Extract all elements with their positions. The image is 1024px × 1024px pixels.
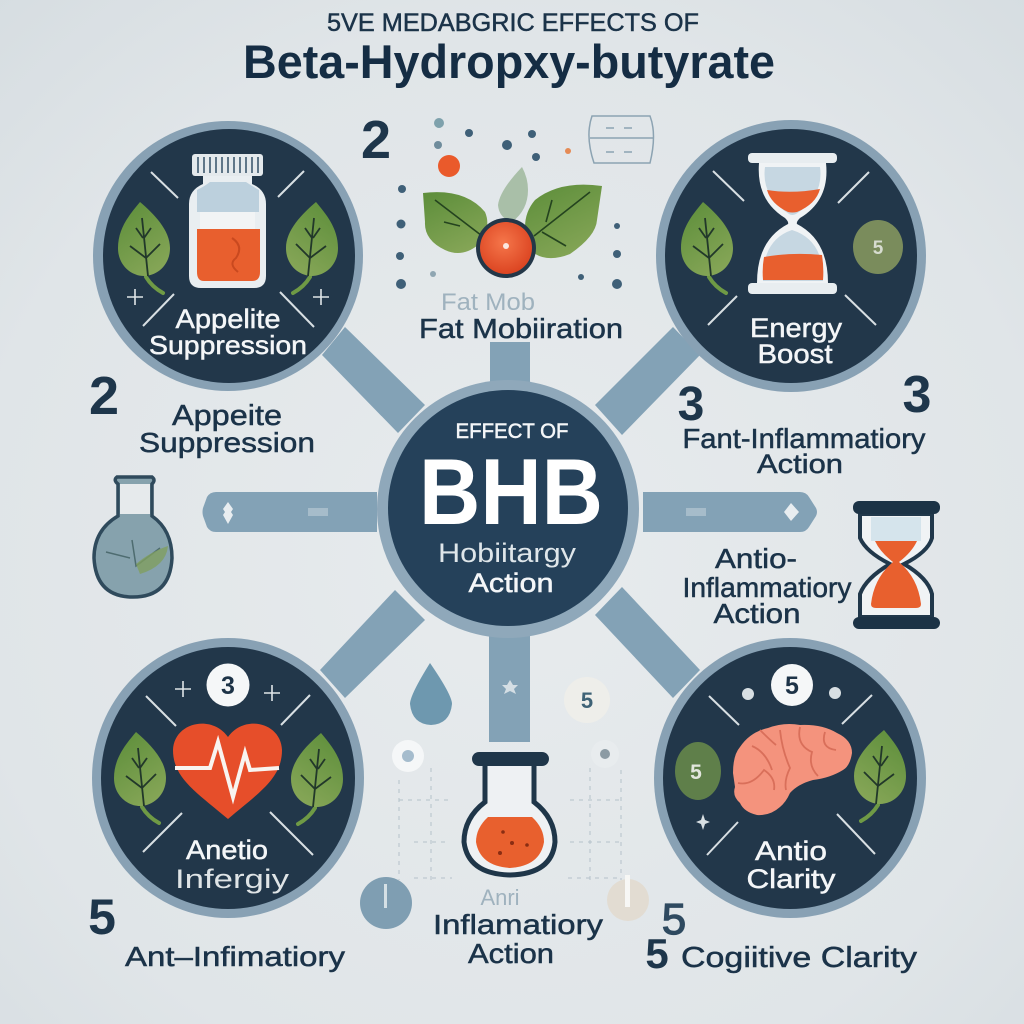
panel: energy boost — [656, 120, 926, 392]
icon: small badge 5: 5 — [581, 688, 593, 713]
label: anti-inflammatory top right: Fant-Inflammatiory — [682, 423, 926, 454]
label: Antio — [755, 836, 827, 866]
panel: anti-inflammatory heart — [92, 638, 364, 918]
label: anti-inflammatory top right — [682, 423, 926, 479]
label: inflammatory action: Inflamatiory — [433, 909, 603, 940]
panel: center BHB: BHB — [419, 439, 603, 544]
icon: sparkles — [127, 289, 329, 305]
label: cognitive clarity: Cogiitive Clarity — [681, 942, 918, 974]
label: anti-inflammatory top right: Action — [757, 449, 843, 479]
panel: center BHB — [377, 380, 639, 638]
label — [175, 835, 290, 894]
fat mobilization icon group — [396, 116, 654, 316]
label: anti-inflammatory right: Action — [714, 598, 800, 629]
label: inflammatory action — [433, 909, 603, 969]
icon: center leaves — [423, 167, 602, 278]
number 2 top: 2 — [361, 110, 391, 170]
label — [746, 836, 836, 894]
label: Clarity — [746, 864, 836, 894]
fat mobilization icon group: Fat Mob — [441, 289, 535, 316]
icon: badge 5 green — [675, 742, 721, 800]
label: anti-inflammatory right — [682, 543, 852, 629]
icon: brain — [733, 724, 852, 815]
icon: flask center — [464, 752, 555, 875]
icon: left leaf — [114, 732, 166, 823]
icon: badge 5: 5 — [785, 672, 799, 700]
icon: orange dot — [438, 155, 460, 177]
icon: badge 3: 3 — [221, 672, 235, 700]
connector marks — [223, 502, 799, 694]
icon: heart — [173, 724, 282, 819]
panel: cognitive clarity brain — [654, 638, 926, 918]
small decorative circles — [360, 740, 649, 929]
label: Anetio — [186, 835, 268, 865]
icon: small badge 5 — [564, 677, 610, 723]
dashed grid — [399, 768, 622, 880]
icon: hourglass — [748, 153, 837, 294]
icon: sparkles — [175, 681, 280, 701]
number 5 bottom left: 5 — [88, 889, 116, 945]
panel: center BHB: EFFECT OF — [456, 420, 568, 443]
icon: jar — [189, 154, 266, 288]
label: Infergiy — [175, 864, 290, 894]
label: Energy — [750, 313, 843, 343]
title: Beta-Hydropxy-butyrate — [243, 35, 775, 88]
label: Boost — [758, 339, 833, 369]
number 5 bottom middle: 5 — [662, 895, 686, 944]
number 5 cognitive: 5 — [645, 930, 669, 977]
icon: badge 3 — [206, 664, 250, 706]
label: inflammatory action: Action — [468, 938, 554, 969]
icon: flask left — [94, 477, 172, 597]
icon: badge 5 — [853, 220, 903, 274]
label — [149, 304, 307, 360]
icon: badge 5: 5 — [873, 238, 884, 259]
dots — [396, 118, 622, 289]
label: appetite suppression: Suppression — [139, 427, 315, 458]
label: anti-inflammatory right: Antio- — [715, 543, 797, 574]
number 2 left: 2 — [89, 366, 119, 426]
icon: hourglass right — [853, 501, 940, 629]
icon: badge 5 green: 5 — [690, 761, 702, 784]
faded text: Anri — [480, 885, 520, 910]
title: 5VE MEDABGRIC EFFECTS OF — [327, 9, 699, 37]
icon: water drop — [410, 663, 452, 725]
icon: left leaf — [681, 202, 733, 293]
label: appetite suppression — [139, 400, 315, 458]
icon: right leaf — [291, 733, 343, 824]
icon: left leaf — [118, 202, 170, 293]
icon: right leaf — [286, 202, 338, 293]
icon: badge 5 — [771, 664, 813, 706]
label: Appelite — [176, 304, 280, 334]
label: anti-inflammatory right: Inflammatiory — [682, 572, 852, 603]
label: anti-inflammatory bottom left: Ant–Infimatiory — [125, 941, 345, 972]
connectors — [202, 327, 817, 742]
label: Suppression — [149, 330, 307, 360]
panel: appetite suppression — [93, 121, 363, 391]
label: appetite suppression: Appeite — [172, 400, 282, 432]
icon: sparkles — [696, 687, 841, 830]
panel: center BHB: Hobiitargy — [438, 538, 577, 568]
panel: center BHB: Action — [468, 568, 554, 598]
icon: right leaf — [854, 730, 906, 821]
label: fat mobilization: Fat Mobiiration — [419, 313, 623, 344]
icon: small box — [589, 116, 654, 163]
number 3 right b: 3 — [903, 366, 931, 424]
title — [243, 9, 775, 88]
number 3 right a: 3 — [678, 378, 704, 431]
label — [750, 313, 843, 369]
